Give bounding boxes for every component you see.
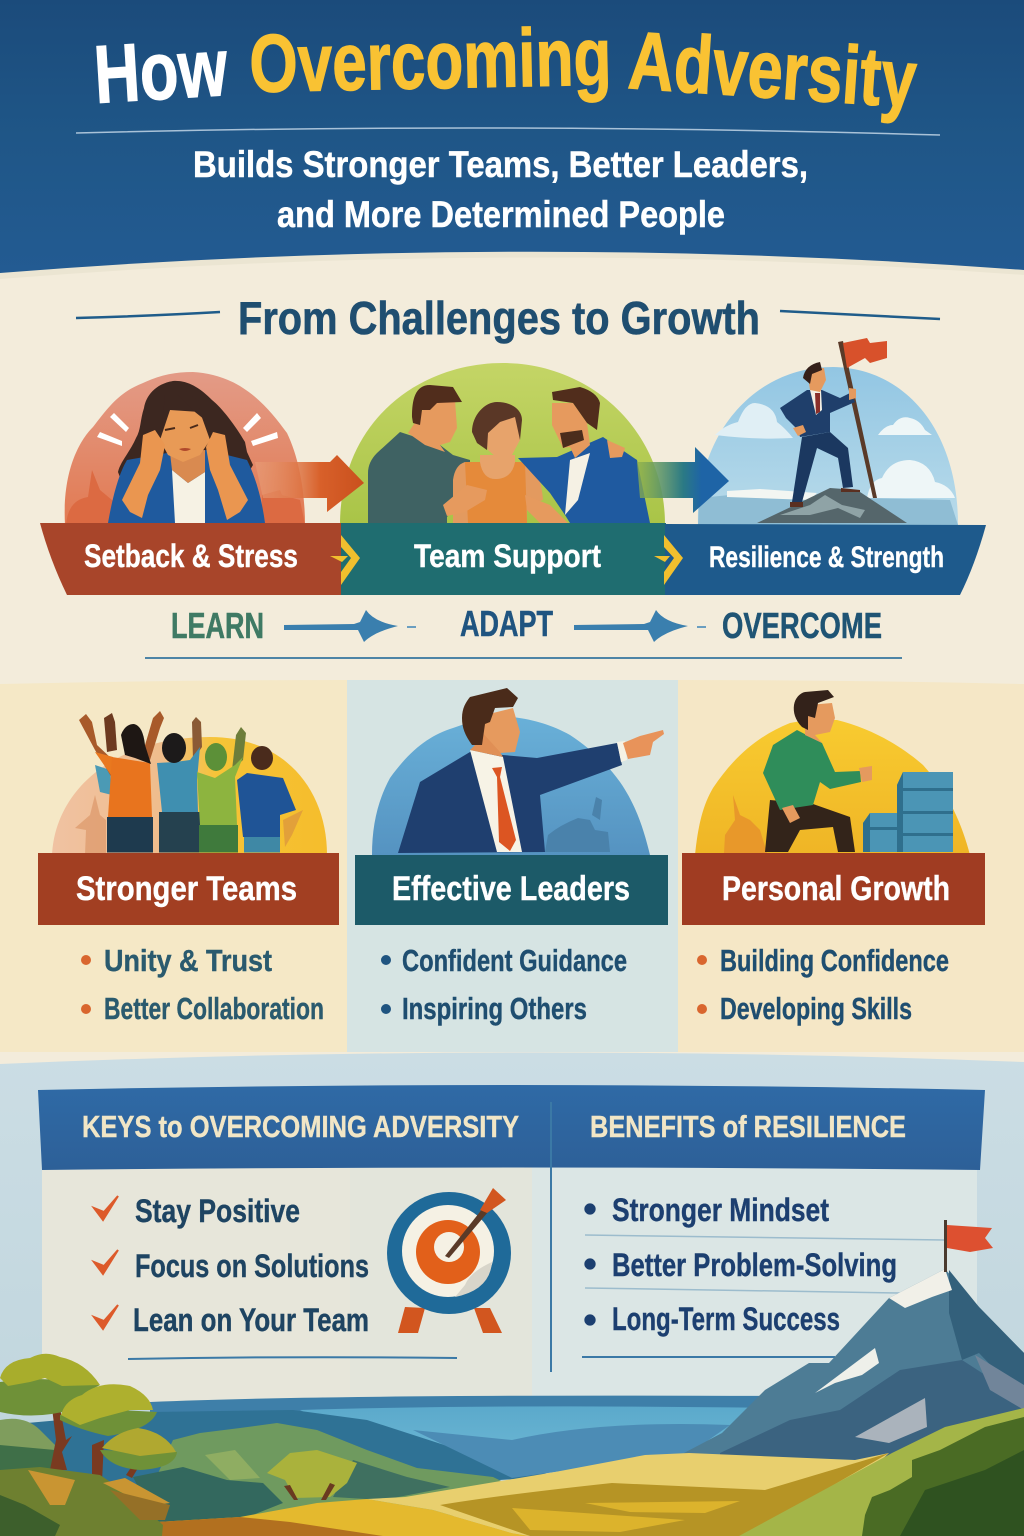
subtitle: and More Determined People — [277, 194, 725, 235]
ground — [157, 1499, 530, 1536]
title — [92, 11, 920, 126]
card: personal growth: Building Confidence — [720, 943, 949, 978]
illustration: personal growth — [695, 690, 970, 855]
banner labels — [84, 538, 944, 574]
section heading: from challenges to growth — [76, 292, 940, 344]
card: stronger teams — [38, 853, 339, 1026]
banner labels: Team Support — [414, 538, 601, 574]
banner labels: Resilience & Strength — [709, 541, 944, 574]
learn adapt overcome row: ADAPT — [460, 603, 553, 644]
card: personal growth: Personal Growth — [722, 870, 950, 908]
process banner — [40, 523, 986, 595]
illustration: team support — [340, 363, 665, 525]
benefits list: Stronger Mindset — [612, 1192, 829, 1228]
card: stronger teams: Unity & Trust — [104, 943, 272, 978]
header band — [0, 0, 1024, 279]
section heading: from challenges to growth: From Challenges to Growth — [238, 292, 760, 344]
keys checklist: Focus on Solutions — [135, 1248, 369, 1284]
illustration: resilience and strength — [698, 338, 958, 525]
flag — [944, 1220, 993, 1272]
benefits list: Better Problem-Solving — [612, 1247, 897, 1283]
green hills — [130, 1423, 520, 1536]
benefits list — [584, 1192, 897, 1337]
title: Adversity — [626, 15, 920, 126]
column backgrounds — [0, 680, 1024, 1052]
card: stronger teams: Better Collaboration — [104, 991, 324, 1026]
card: effective leaders: Inspiring Others — [402, 991, 587, 1026]
panel: keys and benefits — [38, 1085, 985, 1405]
arrow: setback to support — [255, 455, 364, 512]
card: personal growth: Developing Skills — [720, 991, 912, 1026]
illustration: effective leaders — [372, 688, 664, 855]
learn adapt overcome row: LEARN — [171, 605, 264, 646]
card: stronger teams: Stronger Teams — [76, 870, 297, 908]
card: effective leaders — [355, 855, 668, 1026]
right hill — [739, 1408, 1024, 1536]
keys checklist — [94, 1193, 369, 1338]
card: effective leaders: Confident Guidance — [402, 943, 627, 978]
landscape — [0, 1220, 1024, 1536]
icon: target with arrow — [387, 1188, 511, 1333]
learn adapt overcome row — [171, 603, 882, 646]
illustration: setback and stress — [65, 372, 305, 525]
trees left — [0, 1354, 357, 1536]
keys checklist: Stay Positive — [135, 1193, 300, 1229]
chevron — [654, 535, 683, 585]
sea — [27, 1396, 780, 1500]
right bush — [862, 1417, 1024, 1536]
arrow: support to resilience — [637, 447, 729, 513]
keys checklist: Lean on Your Team — [133, 1302, 369, 1338]
mountain — [684, 1269, 1024, 1480]
keys heading: KEYS to OVERCOMING ADVERSITY — [82, 1109, 519, 1144]
subtitle: Builds Stronger Teams, Better Leaders, — [193, 144, 808, 185]
banner labels: Setback & Stress — [84, 538, 298, 574]
subtitle — [193, 144, 808, 235]
card: effective leaders: Effective Leaders — [392, 870, 630, 908]
title: How — [92, 22, 230, 121]
learn adapt overcome row: OVERCOME — [722, 605, 882, 646]
benefits heading: BENEFITS of RESILIENCE — [590, 1109, 906, 1144]
chevron — [330, 535, 360, 585]
illustration: stronger teams — [52, 711, 327, 855]
card: personal growth — [682, 853, 985, 1026]
benefits list: Long-Term Success — [612, 1301, 840, 1337]
title: Overcoming — [248, 11, 612, 110]
bottom section background — [0, 1052, 1024, 1536]
